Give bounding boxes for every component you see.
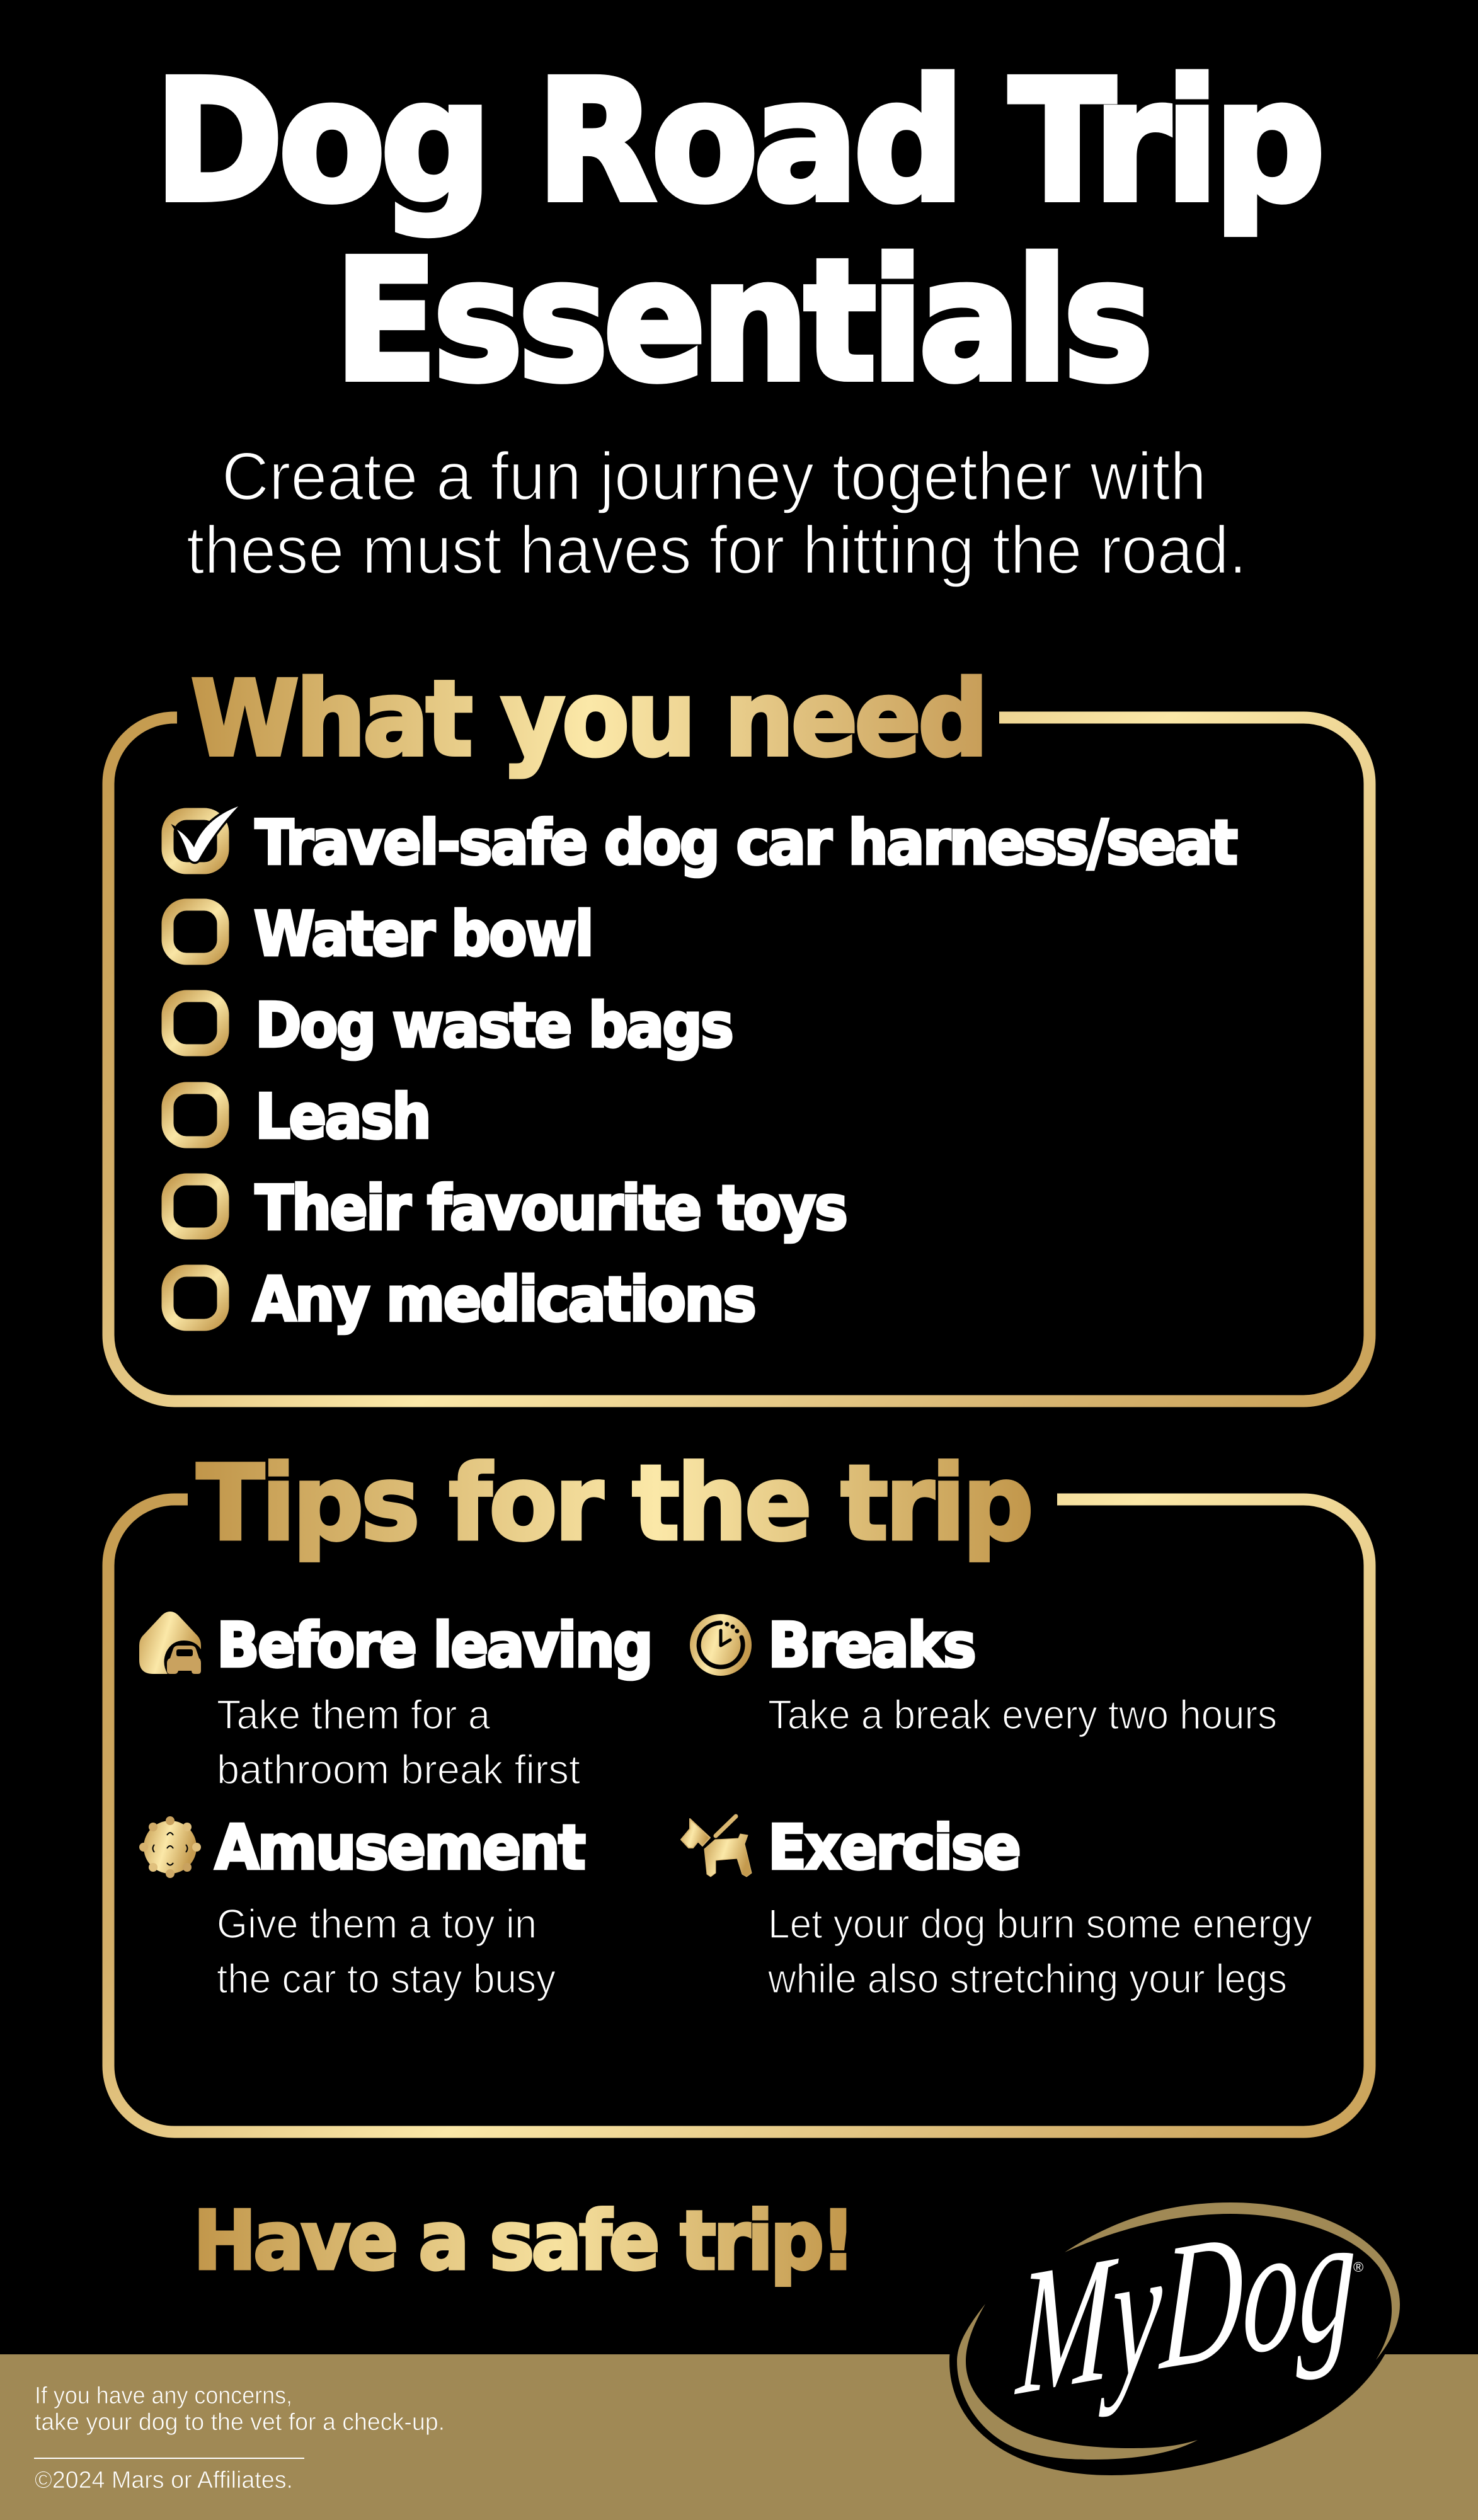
logo swoosh bottom <box>957 2304 1198 2460</box>
panel: what you need <box>108 658 1370 1401</box>
tip: exercise: Let your dog burn some energy <box>768 1901 1312 1947</box>
item: medications: Any medications <box>253 1264 755 1335</box>
checkbox: ticked <box>168 806 238 868</box>
heading: what you need: What you need <box>191 658 985 779</box>
item: leash: Leash <box>255 1081 430 1152</box>
checkbox <box>168 905 223 959</box>
closing message: Have a safe trip! <box>193 2194 852 2288</box>
icon: dog on leash <box>681 1816 752 1877</box>
checkbox <box>168 1271 223 1325</box>
checkbox <box>168 996 223 1050</box>
tip: amusement: Give them a toy in <box>217 1901 537 1947</box>
tip: before leaving <box>217 1610 651 1792</box>
logo: My Dog <box>949 2174 1403 2475</box>
checkbox <box>168 1179 223 1234</box>
footer disclaimer: take your dog to the vet for a check-up. <box>35 2409 445 2436</box>
title: Essentials <box>335 224 1149 418</box>
title: Dog Road Trip <box>154 45 1320 239</box>
logo wordmark: MyDog <box>1012 2174 1360 2434</box>
item: toys: Their favourite toys <box>255 1172 846 1244</box>
logo black oval <box>949 2202 1403 2475</box>
item: waste bags: Dog waste bags <box>255 990 732 1061</box>
tip: exercise: Exercise <box>768 1812 1019 1883</box>
tip: exercise <box>767 1812 1312 2002</box>
tip: before leaving: Before leaving <box>217 1610 651 1681</box>
tip: amusement: Amusement <box>215 1812 585 1883</box>
tip: exercise: while also stretching your legs <box>767 1956 1287 2002</box>
subtitle: Create a fun journey together with <box>222 438 1206 514</box>
footer band <box>0 2354 1478 2520</box>
icon: toy ball <box>139 1816 201 1878</box>
checkbox <box>168 1088 223 1142</box>
footer disclaimer <box>34 2383 445 2494</box>
tip: breaks: Take a break every two hours <box>768 1692 1277 1738</box>
subtitle: these must haves for hitting the road. <box>186 512 1247 588</box>
tip: amusement <box>215 1812 585 2002</box>
panel: tips for the trip <box>108 1443 1370 2132</box>
panel border <box>108 1499 1370 2132</box>
item: harness: Travel-safe dog car harness/seat <box>255 807 1237 878</box>
heading: tips: Tips for the trip <box>197 1443 1031 1564</box>
title <box>154 45 1320 418</box>
footer disclaimer: If you have any concerns, <box>35 2383 292 2409</box>
subtitle <box>186 438 1247 588</box>
tip: before leaving: Take them for a <box>217 1692 491 1738</box>
logo swoosh top <box>1065 2202 1400 2360</box>
icon: house with car <box>139 1612 201 1674</box>
item: water bowl: Water bowl <box>254 898 592 970</box>
registered mark: ® <box>1353 2259 1363 2275</box>
footer disclaimer: ©2024 Mars or Affiliates. <box>35 2467 293 2494</box>
panel border <box>108 718 1370 1401</box>
tip: before leaving: bathroom break first <box>217 1746 580 1792</box>
tip: breaks <box>768 1610 1277 1738</box>
tip: amusement: the car to stay busy <box>217 1956 556 2002</box>
icon: clock <box>690 1614 752 1676</box>
tip: breaks: Breaks <box>768 1610 975 1681</box>
